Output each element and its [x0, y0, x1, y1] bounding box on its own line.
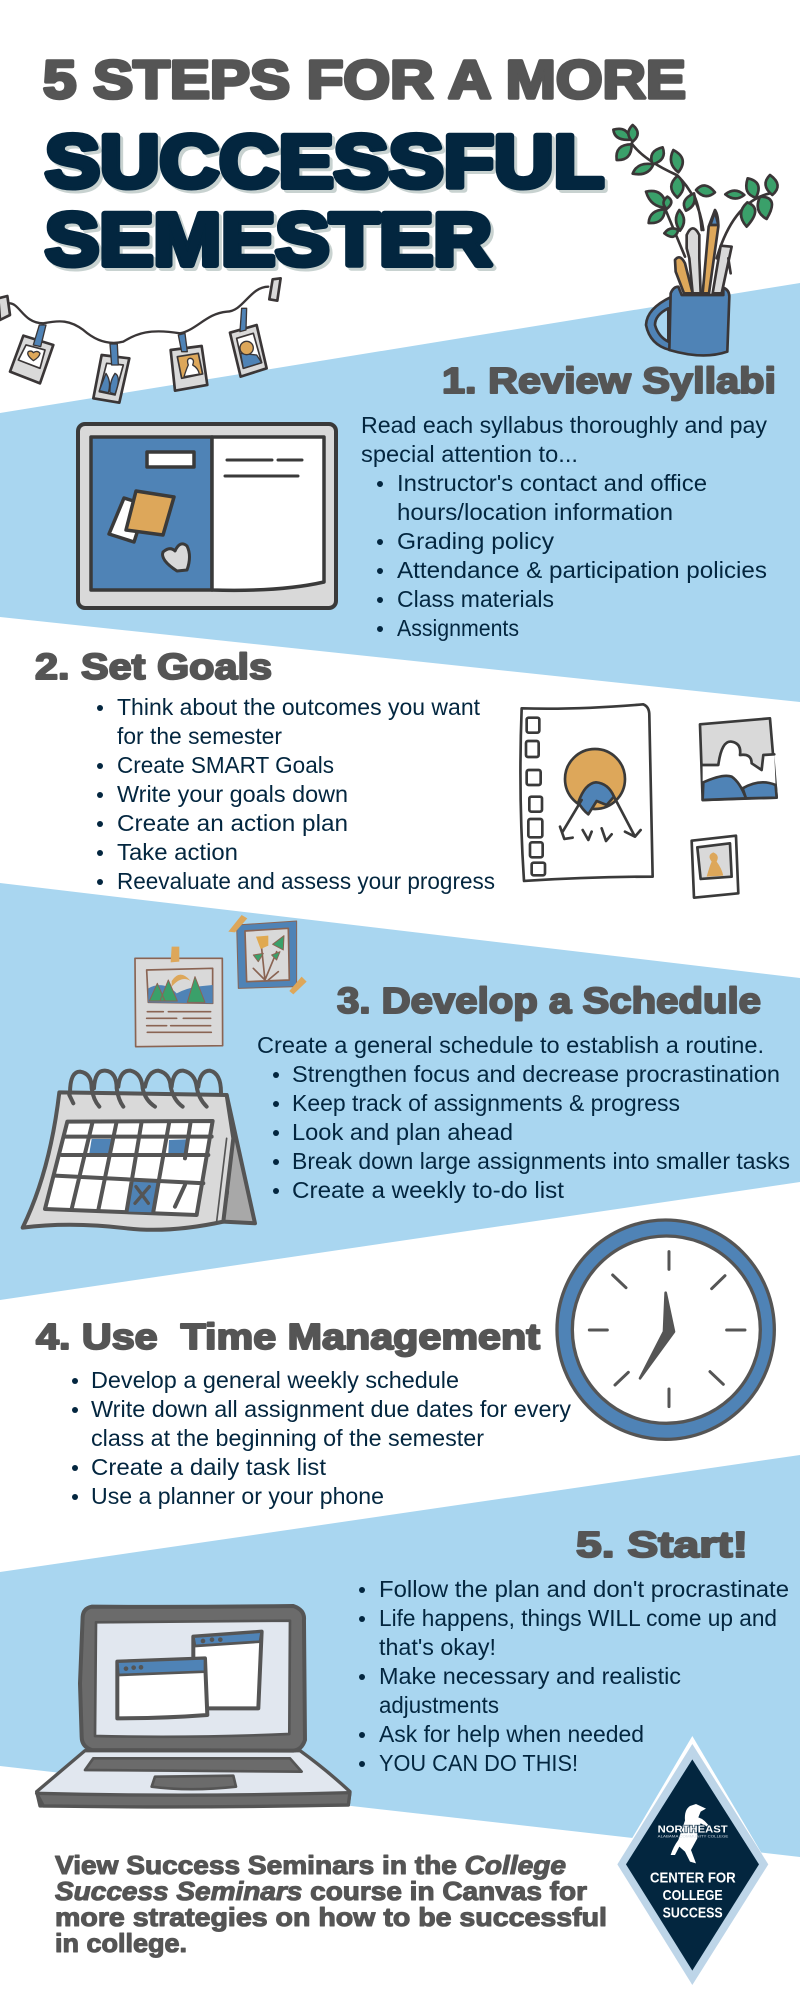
title: SUCCESSFUL — [45, 120, 604, 203]
footer call to action: Success Seminars course in Canvas for — [55, 1876, 587, 1906]
text block: step 4: Write down all assignment due dates for every — [91, 1396, 572, 1422]
logo: Center for College Success diamond: COLLEGE — [663, 1887, 723, 1904]
text block: step 5: adjustments — [379, 1692, 499, 1718]
icon: photo garland — [0, 278, 281, 403]
icon: goal sketches — [520, 704, 777, 898]
text block: step 3: Look and plan ahead — [292, 1119, 513, 1145]
icon: desk calendar — [23, 1071, 255, 1230]
footer call to action: View Success Seminars in the College — [55, 1850, 566, 1880]
icon: open binder — [78, 424, 336, 608]
text block: step 4: Create a daily task list — [91, 1454, 327, 1480]
text block: step 1: Assignments — [397, 615, 519, 641]
text block: step 2: Take action — [117, 839, 238, 865]
text block: step 3 — [257, 1032, 790, 1203]
footer call to action: in college. — [55, 1928, 187, 1958]
text block: step 3: Break down large assignments into smaller tasks — [292, 1148, 790, 1174]
title: SEMESTER — [45, 198, 492, 281]
text block: step 1: Class materials — [397, 586, 554, 612]
footer call to action — [55, 1850, 607, 1958]
text block: step 2: Think about the outcomes you want — [117, 694, 481, 720]
heading: step 4: 4. Use Time Management — [36, 1316, 540, 1357]
title — [43, 50, 686, 281]
text block: step 1 — [361, 412, 767, 641]
text block: step 1: Grading policy — [397, 528, 555, 554]
text block: step 4: class at the beginning of the semester — [91, 1425, 484, 1451]
text block: step 1: Instructor's contact and office — [397, 470, 707, 496]
text block: step 3: Keep track of assignments & progress — [292, 1090, 680, 1116]
icon: horse — [671, 1804, 711, 1863]
text block: step 5: Follow the plan and don't procrastinate — [379, 1576, 789, 1602]
text block: step 5: Make necessary and realistic — [379, 1663, 681, 1689]
text block: step 4 — [72, 1367, 572, 1509]
logo: Center for College Success diamond — [617, 1736, 768, 1985]
text block: step 2: Create an action plan — [117, 810, 348, 836]
icon: clock — [557, 1220, 774, 1439]
footer call to action: more strategies on how to be successful — [55, 1902, 607, 1932]
logo: Center for College Success diamond: NORTHEAST — [658, 1825, 728, 1836]
text block: step 3: Create a general schedule to establish a routine. — [257, 1032, 764, 1058]
text block: step 4: Develop a general weekly schedule — [91, 1367, 459, 1393]
text block: step 5 — [359, 1576, 789, 1776]
text block: step 5: Life happens, things WILL come up and — [379, 1605, 777, 1631]
blue band: step 5 — [0, 1455, 800, 1857]
heading: step 3: 3. Develop a Schedule — [337, 980, 761, 1021]
text block: step 2: Reevaluate and assess your progress — [117, 868, 495, 894]
blue band: step 1 — [0, 283, 800, 702]
title: 5 STEPS FOR A MORE — [43, 50, 686, 110]
logo: Center for College Success diamond: CENTER FOR — [650, 1870, 736, 1887]
text block: step 1: Read each syllabus thoroughly and pay — [361, 412, 767, 438]
text block: step 2: Write your goals down — [117, 781, 348, 807]
text block: step 2: for the semester — [117, 723, 282, 749]
heading: step 2: 2. Set Goals — [35, 646, 272, 687]
text block: step 5: that's okay! — [379, 1634, 496, 1660]
icon: laptop — [37, 1606, 350, 1807]
heading: step 5: 5. Start! — [576, 1524, 748, 1565]
logo: Center for College Success diamond: SUCCESS — [663, 1905, 723, 1922]
text block: step 4: Use a planner or your phone — [91, 1483, 384, 1509]
text block: step 5: YOU CAN DO THIS! — [379, 1750, 578, 1776]
text block: step 3: Strengthen focus and decrease procrastination — [292, 1061, 780, 1087]
text block: step 3: Create a weekly to-do list — [292, 1177, 565, 1203]
icon: mug with pens and plant — [613, 125, 778, 355]
text block: step 1: Attendance & participation policies — [397, 557, 767, 583]
text block: step 2 — [97, 694, 495, 894]
heading: step 1: 1. Review Syllabi — [442, 360, 776, 401]
text block: step 1: hours/location information — [397, 499, 673, 525]
blue band: step 3 — [0, 883, 800, 1300]
text block: step 2: Create SMART Goals — [117, 752, 334, 778]
logo: Center for College Success diamond: ALABAMA COMMUNITY COLLEGE — [658, 1835, 729, 1839]
text block: step 1: special attention to... — [361, 441, 578, 467]
text block: step 5: Ask for help when needed — [379, 1721, 644, 1747]
icon: wall pictures — [135, 915, 307, 1047]
